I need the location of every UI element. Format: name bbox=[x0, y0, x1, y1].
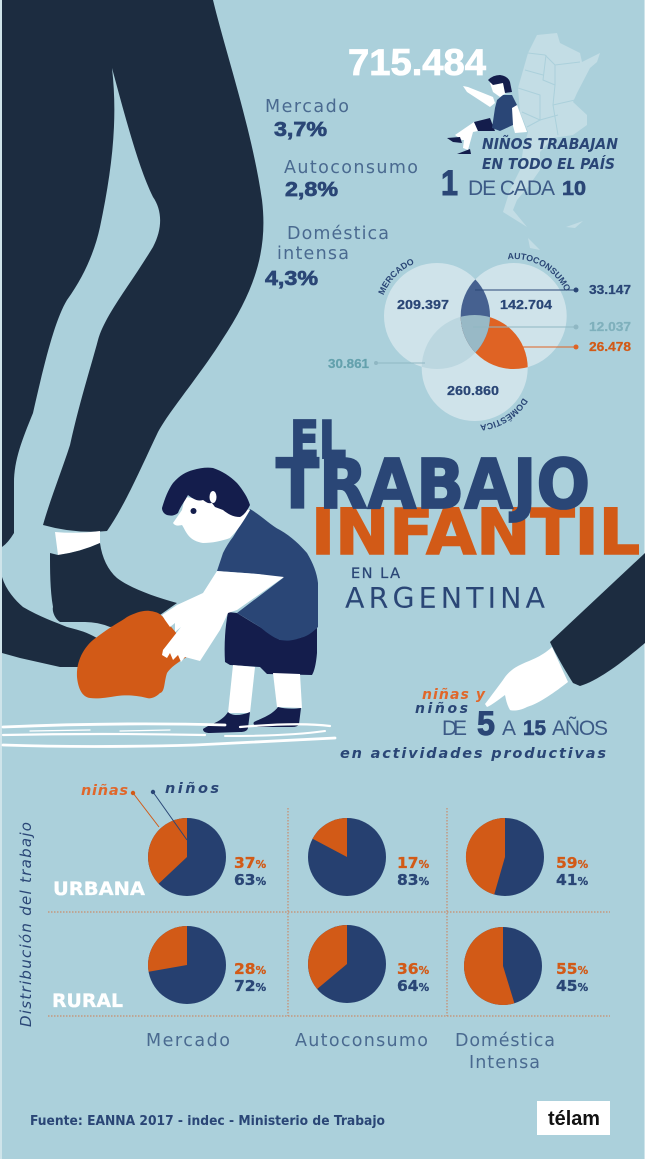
venn diagram: 26.478 bbox=[589, 339, 631, 354]
row labels: RURAL bbox=[52, 991, 123, 1012]
pie: rural doméstica: 45% bbox=[556, 977, 589, 995]
column labels: Mercado bbox=[146, 1031, 230, 1051]
venn diagram bbox=[328, 252, 631, 430]
stats by activity: 2,8% bbox=[285, 179, 338, 201]
venn diagram: 30.861 bbox=[328, 356, 369, 371]
venn diagram: DOMÉSTICA bbox=[480, 398, 528, 430]
column labels: Autoconsumo bbox=[295, 1031, 428, 1051]
pie: rural autoconsumo bbox=[308, 925, 430, 1003]
pie: rural doméstica bbox=[464, 927, 589, 1005]
illustration: child bending over bbox=[162, 468, 318, 733]
legend leader lines bbox=[131, 790, 187, 840]
venn diagram: 142.704 bbox=[500, 297, 553, 312]
venn diagram: MERCADO bbox=[378, 259, 414, 295]
row labels: URBANA bbox=[53, 879, 146, 900]
illustration: floor strokes bbox=[3, 724, 335, 746]
stats by activity: Doméstica bbox=[287, 224, 389, 244]
headline figure: 715.484: 715.484 bbox=[348, 42, 486, 83]
télam logo: télam bbox=[548, 1108, 600, 1130]
title: TRABAJO bbox=[276, 445, 590, 525]
stats by activity: intensa bbox=[277, 244, 349, 264]
pie: rural mercado bbox=[148, 926, 267, 1004]
column labels: Doméstica bbox=[455, 1031, 555, 1051]
stats by activity: Mercado bbox=[265, 97, 349, 117]
pie: urbana doméstica: 59% bbox=[556, 854, 589, 872]
illustration: adult legs and shoes bbox=[2, 0, 263, 667]
pie: rural autoconsumo: 64% bbox=[397, 977, 430, 995]
row labels bbox=[52, 879, 146, 1012]
title: ARGENTINA bbox=[345, 582, 546, 615]
pie: rural doméstica: 55% bbox=[556, 960, 589, 978]
venn diagram: 33.147 bbox=[589, 282, 631, 297]
subtitle: niñas y niños de 5 a 15 años: 15 bbox=[523, 717, 546, 740]
pie: urbana doméstica bbox=[466, 818, 589, 896]
caption: 1 de cada 10 bbox=[441, 164, 586, 203]
column labels bbox=[146, 1031, 555, 1073]
subtitle: niñas y niños de 5 a 15 años: DE bbox=[442, 717, 467, 740]
stats by activity: 3,7% bbox=[274, 119, 327, 141]
subtitle: niñas y niños de 5 a 15 años bbox=[340, 687, 608, 762]
title bbox=[276, 411, 640, 615]
subtitle: niñas y niños de 5 a 15 años: A bbox=[502, 717, 516, 740]
venn diagram: 12.037 bbox=[589, 319, 631, 334]
subtitle: niñas y niños de 5 a 15 años: niñas y bbox=[422, 687, 486, 703]
map of Argentina bbox=[503, 33, 600, 250]
stats by activity: Autoconsumo bbox=[284, 158, 418, 178]
pie: urbana autoconsumo: 17% bbox=[397, 854, 430, 872]
legend: niñas y niños: niños bbox=[165, 781, 219, 797]
illustration: sitting child bbox=[447, 75, 527, 154]
pie: urbana doméstica: 41% bbox=[556, 871, 589, 889]
illustration: orange rag bbox=[77, 611, 187, 698]
title: EN LA bbox=[351, 566, 400, 582]
caption: niños trabajan en todo el país: EN TODO EL PAÍS bbox=[482, 154, 615, 173]
caption: niños trabajan en todo el país bbox=[482, 134, 618, 173]
pie: urbana mercado: 37% bbox=[234, 854, 267, 872]
caption: 1 de cada 10: 1 bbox=[441, 164, 458, 203]
grid lines bbox=[48, 808, 610, 1016]
pie: rural mercado: 28% bbox=[234, 960, 267, 978]
subtitle: niñas y niños de 5 a 15 años: niños bbox=[415, 701, 468, 717]
venn diagram: 260.860 bbox=[447, 383, 499, 398]
pie: urbana mercado: 63% bbox=[234, 871, 267, 889]
illustration: pointing hand and sleeve bbox=[485, 553, 645, 711]
subtitle: niñas y niños de 5 a 15 años: AÑOS bbox=[552, 716, 608, 740]
caption: 1 de cada 10: DE CADA bbox=[468, 177, 555, 200]
source: Fuente: EANNA 2017 - indec - Ministerio de Trabajo bbox=[30, 1114, 385, 1129]
pie: rural autoconsumo: 36% bbox=[397, 960, 430, 978]
venn diagram: AUTOCONSUMO bbox=[508, 252, 570, 291]
pie: urbana mercado bbox=[148, 818, 267, 896]
column labels: Intensa bbox=[469, 1053, 540, 1073]
subtitle: niñas y niños de 5 a 15 años: 5 bbox=[477, 705, 495, 743]
pie: urbana autoconsumo: 83% bbox=[397, 871, 430, 889]
pie: urbana autoconsumo bbox=[308, 818, 430, 896]
caption: 1 de cada 10: 10 bbox=[562, 178, 586, 200]
title: EL bbox=[290, 411, 346, 471]
legend: niñas y niños bbox=[81, 781, 219, 799]
caption: niños trabajan en todo el país: NIÑOS TRABAJAN bbox=[482, 134, 618, 153]
pie: rural mercado: 72% bbox=[234, 977, 267, 995]
axis label: Distribución del trabajo bbox=[17, 822, 35, 1027]
stats by activity: 4,3% bbox=[265, 268, 318, 290]
stats by activity bbox=[265, 97, 418, 290]
legend: niñas y niños: niñas bbox=[81, 783, 128, 799]
venn diagram: 209.397 bbox=[397, 297, 449, 312]
subtitle: niñas y niños de 5 a 15 años: en actividades productivas bbox=[340, 746, 606, 762]
title: INFANTIL bbox=[311, 496, 640, 569]
télam logo bbox=[537, 1101, 610, 1135]
